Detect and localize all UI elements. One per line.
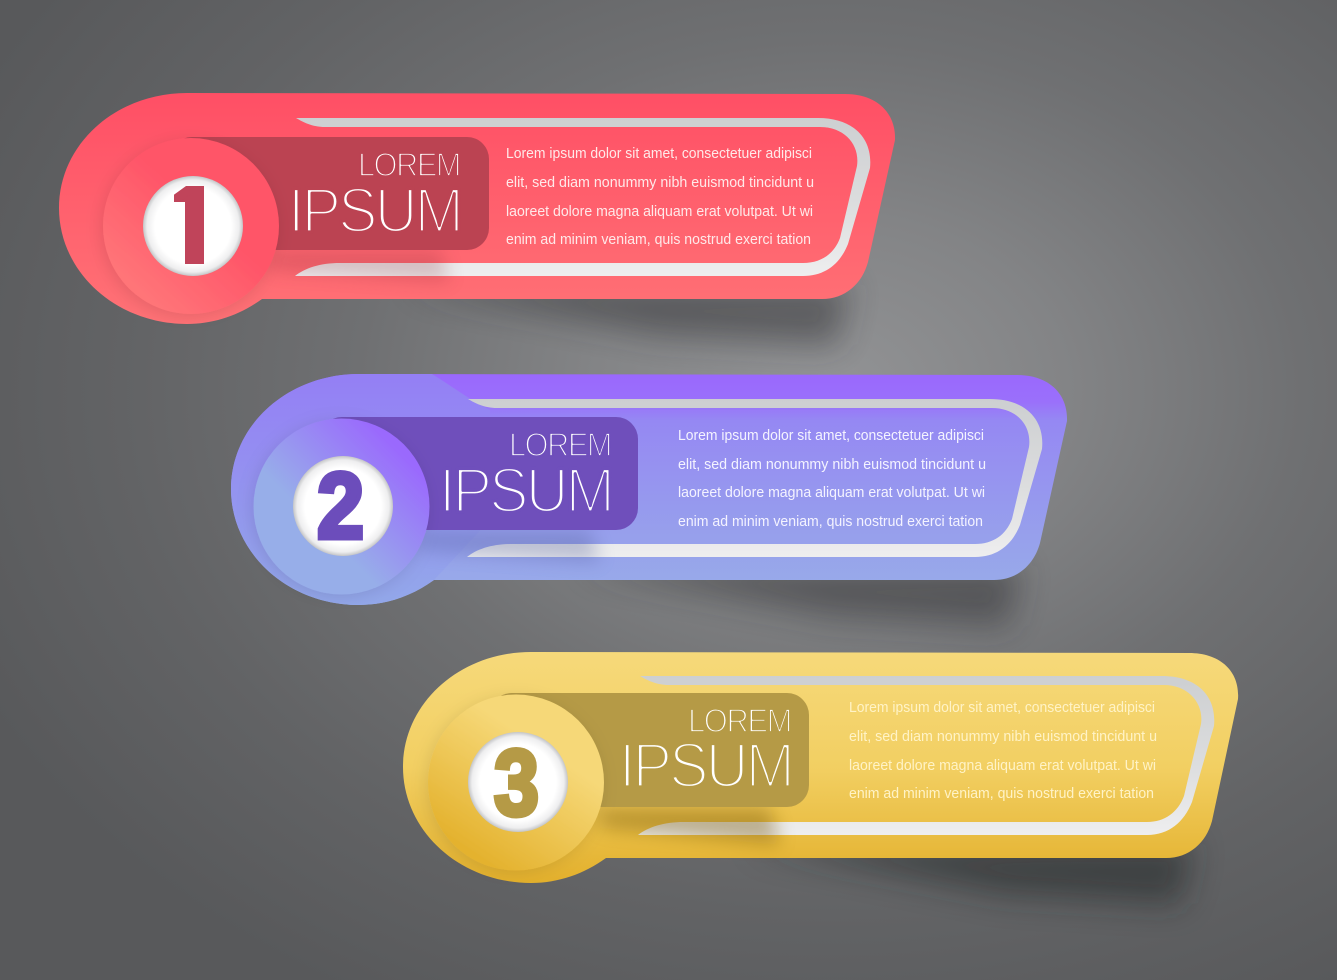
banner 1 LOREM: LOREM xyxy=(358,146,460,183)
banner 1 label shadow xyxy=(270,250,450,282)
banner 1 title plate xyxy=(170,137,489,250)
banner 2 paragraph: Lorem ipsum dolor sit amet, consectetuer adipisci xyxy=(678,428,984,444)
banner 2 paragraph: elit, sed diam nonummy nibh euismod tincidunt u xyxy=(678,457,986,473)
banner 3 number: 3 xyxy=(494,730,539,835)
banner 1 number hole xyxy=(143,176,243,276)
banner 1 silver ring xyxy=(295,118,870,276)
banner 3 plate shape xyxy=(490,693,809,807)
banner 1 number: 1 xyxy=(167,167,219,284)
banner 3 paragraph: elit, sed diam nonummy nibh euismod tincidunt u xyxy=(849,729,1157,745)
banner 3 silver ring xyxy=(638,676,1214,835)
banner 3 paragraph: enim ad minim veniam, quis nostrud exerci tation xyxy=(849,786,1154,802)
banner 2 number disc xyxy=(254,418,430,594)
banner 2 plate shape xyxy=(320,417,638,530)
banner 2 paragraph: enim ad minim veniam, quis nostrud exerci tation xyxy=(678,514,983,530)
banner 3 paragraph xyxy=(849,700,1157,802)
banner 2 title plate xyxy=(320,417,638,530)
banner 3 label shadow xyxy=(600,807,780,845)
banner 1 paragraph: laoreet dolore magna aliquam erat volutpat. Ut wi xyxy=(506,204,813,220)
banner 3 cast shadow xyxy=(744,844,1194,904)
banner 1 cast shadow xyxy=(400,285,850,345)
banner 1 paragraph: Lorem ipsum dolor sit amet, consectetuer adipisci xyxy=(506,146,812,162)
banner 2 left lobe tint xyxy=(231,374,490,605)
banner 1 paragraph: elit, sed diam nonummy nibh euismod tincidunt u xyxy=(506,175,814,191)
banner 2 IPSUM: IPSUM xyxy=(439,456,612,526)
banner 1 xyxy=(59,93,895,345)
banner 1 paragraph: enim ad minim veniam, quis nostrud exerci tation xyxy=(506,232,811,248)
banner 3 title plate xyxy=(490,693,809,807)
banner 3 IPSUM: IPSUM xyxy=(619,731,792,801)
banner 1 IPSUM: IPSUM xyxy=(288,176,461,246)
banner 2 xyxy=(231,374,1067,626)
banner 3 body xyxy=(403,652,1238,883)
banner 2 cast shadow xyxy=(572,566,1022,626)
banner 2 paragraph: laoreet dolore magna aliquam erat volutpat. Ut wi xyxy=(678,485,985,501)
banner 3 xyxy=(403,652,1238,904)
banner 2 number hole xyxy=(293,456,393,556)
banner 3 paragraph: laoreet dolore magna aliquam erat volutpat. Ut wi xyxy=(849,758,1156,774)
banner 1 plate shape xyxy=(170,137,489,250)
banner 1 body xyxy=(59,93,895,324)
banner 2 number: 2 xyxy=(317,453,364,558)
banner 3 number disc xyxy=(428,694,604,870)
banner 1 number disc xyxy=(103,138,279,314)
banner 2 silver ring xyxy=(467,399,1042,557)
banner 2 body xyxy=(231,374,1067,605)
banner 2 label shadow xyxy=(420,530,600,562)
banner 1 paragraph xyxy=(506,146,814,248)
banner 3 paragraph: Lorem ipsum dolor sit amet, consectetuer adipisci xyxy=(849,700,1155,716)
banner 3 LOREM: LOREM xyxy=(688,702,791,739)
banner 3 number hole xyxy=(468,732,568,832)
banner 2 LOREM: LOREM xyxy=(509,426,611,463)
banner 2 paragraph xyxy=(678,428,986,530)
